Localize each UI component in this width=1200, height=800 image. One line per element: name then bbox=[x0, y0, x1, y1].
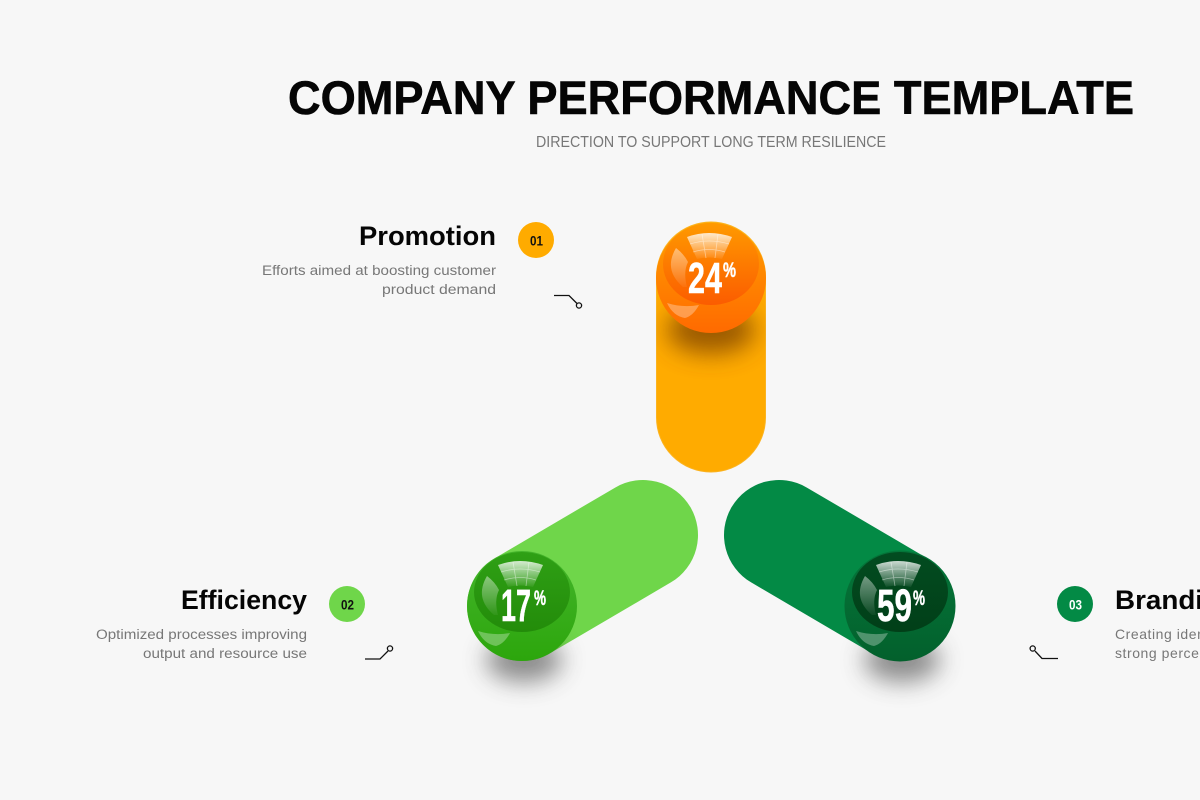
pill: promotion bbox=[656, 222, 766, 472]
sphere: 59%: 59 bbox=[877, 580, 912, 631]
shadow: orange sphere bbox=[667, 306, 755, 354]
label: efficiency: Optimized processes improving bbox=[96, 627, 307, 642]
connector 01 bbox=[554, 296, 582, 308]
badge 01 bbox=[518, 222, 554, 258]
badge 02: 02 bbox=[341, 596, 354, 612]
badge 03: 03 bbox=[1069, 596, 1082, 612]
sphere: 17%: % bbox=[534, 587, 546, 610]
sphere: 24%: 24 bbox=[688, 254, 722, 303]
sphere: 59% bbox=[844, 550, 956, 662]
connector 02 bbox=[365, 646, 393, 659]
label: efficiency: output and resource use bbox=[143, 646, 307, 661]
badge 01: 01 bbox=[530, 232, 543, 248]
pill: branding bbox=[779, 535, 900, 606]
badge 02 bbox=[329, 586, 365, 622]
shadow: dark green sphere bbox=[864, 638, 940, 682]
label: promotion: product demand bbox=[382, 282, 496, 297]
label: promotion: Efforts aimed at boosting customer bbox=[262, 263, 497, 278]
label: promotion bbox=[262, 221, 497, 297]
pill: efficiency bbox=[522, 535, 643, 606]
sphere: 59%: % bbox=[913, 587, 925, 610]
label: promotion: Promotion bbox=[359, 221, 496, 251]
sphere: 24% bbox=[656, 223, 766, 333]
subtitle: DIRECTION TO SUPPORT LONG TERM RESILIENCE bbox=[536, 134, 886, 151]
sphere: 17%: 17 bbox=[501, 580, 531, 631]
connector 03 bbox=[1030, 646, 1058, 658]
title: COMPANY PERFORMANCE TEMPLATE bbox=[288, 71, 1134, 124]
sphere: 24%: % bbox=[723, 259, 736, 282]
shadow: green sphere bbox=[486, 638, 562, 682]
label: efficiency bbox=[96, 585, 307, 661]
badge 03 bbox=[1057, 586, 1093, 622]
infographic canvas bbox=[96, 80, 1200, 698]
label: efficiency: Efficiency bbox=[181, 585, 307, 615]
label: branding bbox=[1115, 585, 1200, 661]
sphere: 17% bbox=[467, 551, 577, 661]
